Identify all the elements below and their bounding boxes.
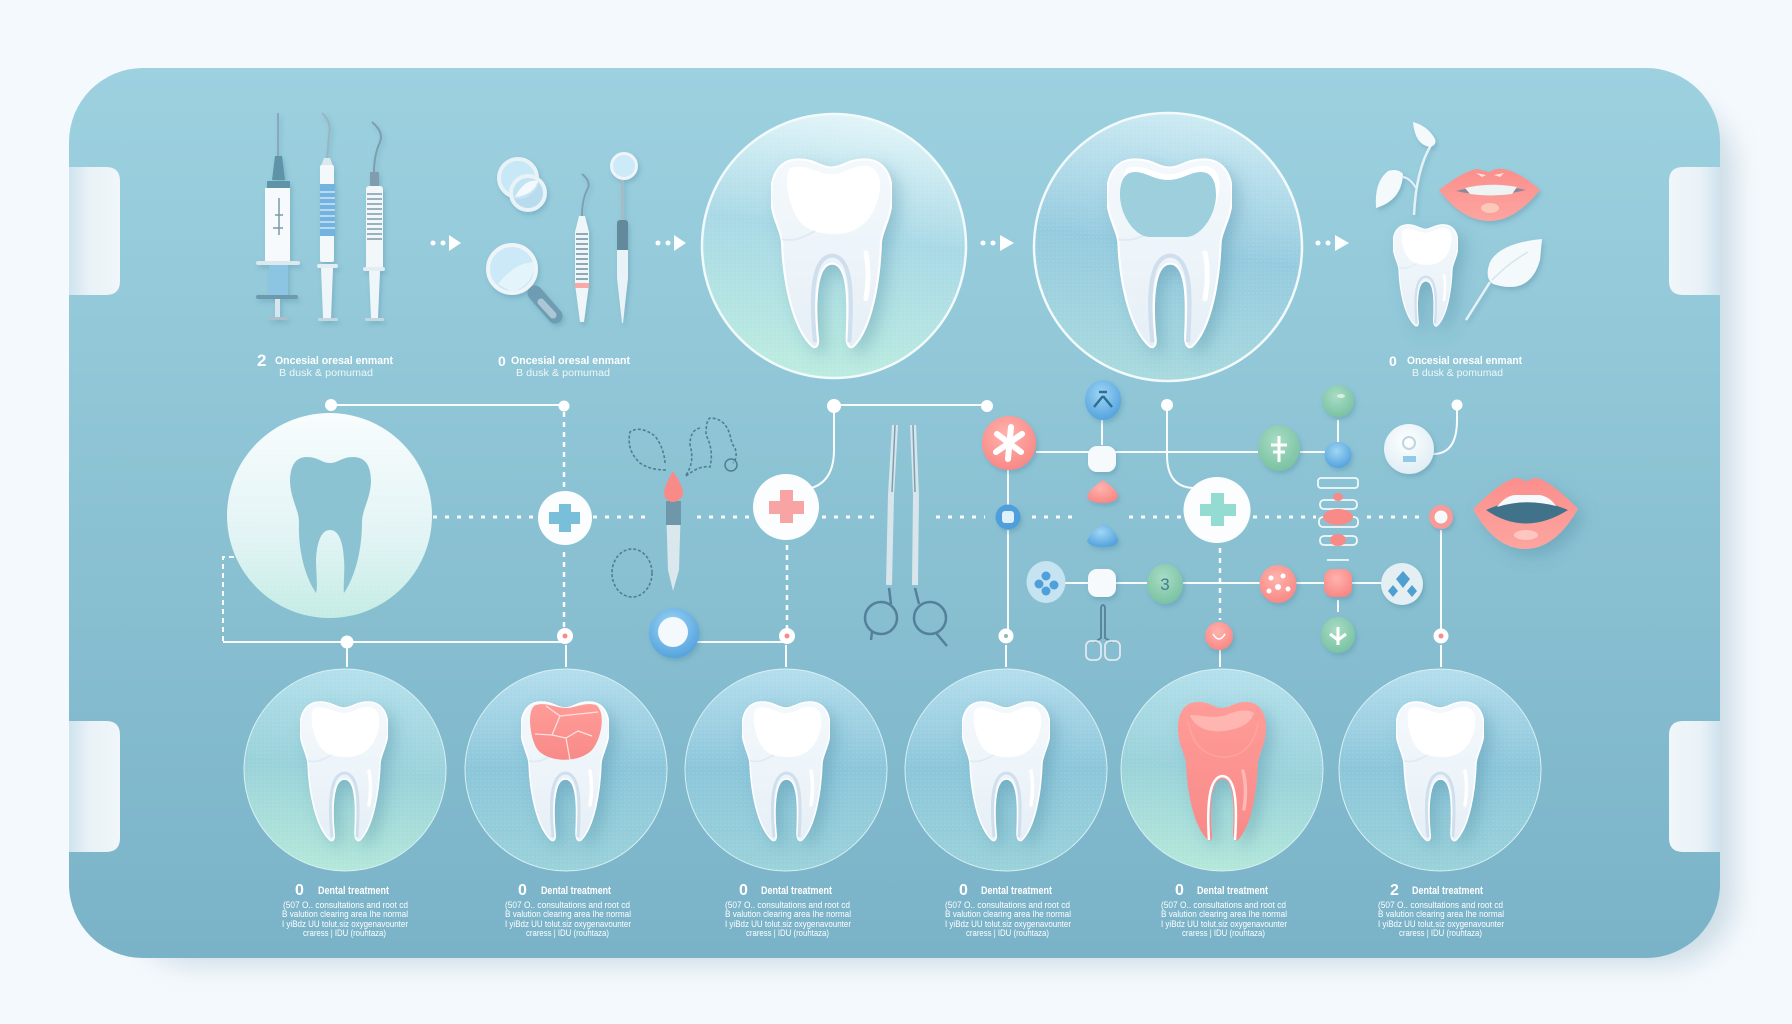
icon: pink ring node xyxy=(1429,505,1453,529)
panel shadow xyxy=(125,100,1735,965)
icon: tooth xyxy=(1393,225,1458,326)
icon: tooth xyxy=(742,702,830,841)
icon: blue drop xyxy=(1087,524,1118,547)
left tooth circle xyxy=(227,413,432,618)
caption 5: craress | IDU (rouhtaza) xyxy=(1182,928,1265,938)
icon: sprig of leaves xyxy=(1376,122,1435,215)
icon: pink flower xyxy=(1260,565,1296,603)
row of six treatment circles xyxy=(244,669,1541,938)
caption 1 xyxy=(282,882,408,938)
side tab: upper left xyxy=(69,167,120,295)
icon: white badge xyxy=(1384,424,1434,474)
node: open dots xyxy=(325,399,1462,648)
icon: tooth xyxy=(771,159,892,347)
node: blue square xyxy=(996,504,1020,530)
caption 4: (507 O.. consultations and root cd xyxy=(945,900,1070,910)
treatment 5 xyxy=(1121,669,1323,938)
icon: green top badge xyxy=(1322,385,1354,417)
caption 1: 0 xyxy=(295,882,304,899)
caption 3 xyxy=(725,882,851,938)
treatment 4 xyxy=(905,669,1107,938)
caption 4: craress | IDU (rouhtaza) xyxy=(966,928,1049,938)
icon: tooth silhouette xyxy=(290,457,371,593)
caption 5: 0 xyxy=(1175,882,1184,899)
node: pink plus xyxy=(753,474,819,540)
icon: dental mirror xyxy=(612,154,636,323)
caption 5 xyxy=(1161,882,1287,938)
caption 6: (507 O.. consultations and root cd xyxy=(1378,900,1503,910)
icon: open mouth xyxy=(1473,478,1578,549)
caption 4: 0 xyxy=(959,882,968,899)
caption 2: craress | IDU (rouhtaza) xyxy=(526,928,609,938)
caption 4: B valution clearing area Ihe normal xyxy=(945,909,1071,919)
step 2 caption xyxy=(498,353,630,379)
icon: red tooth xyxy=(1178,702,1266,841)
icon: tooth with cavity xyxy=(1107,159,1232,347)
step 5 caption xyxy=(1389,353,1522,379)
icon: suture needle with thread xyxy=(612,418,737,597)
caption 6 xyxy=(1378,882,1504,938)
arrow 3 xyxy=(980,235,1014,251)
step 1: instruments xyxy=(256,113,393,379)
caption 5: B valution clearing area Ihe normal xyxy=(1161,909,1287,919)
icon: dental explorer xyxy=(363,122,385,321)
treatment 3 xyxy=(685,669,887,938)
connector lines xyxy=(223,405,1457,667)
step 1 caption xyxy=(257,351,393,379)
step 1 caption: 2 xyxy=(257,351,266,370)
icon: green badge 3: 3 xyxy=(1160,575,1170,594)
caption 6: craress | IDU (rouhtaza) xyxy=(1399,928,1482,938)
caption 1: B valution clearing area Ihe normal xyxy=(282,909,408,919)
icon: blue molecule xyxy=(1026,561,1066,603)
caption 2: B valution clearing area Ihe normal xyxy=(505,909,631,919)
caption 5: Dental treatment xyxy=(1197,885,1268,897)
large circle: hollow tooth xyxy=(1034,113,1302,381)
icon: surgical scissors xyxy=(865,425,947,646)
dotted connector lines xyxy=(223,412,1425,642)
side tab: lower left xyxy=(69,721,120,852)
caption 4: I yiBdz UU tolut.siz oxygenavounter xyxy=(945,919,1071,929)
caption 6: Dental treatment xyxy=(1412,885,1483,897)
icon: green plant badge xyxy=(1258,425,1300,471)
caption 2: I yiBdz UU tolut.siz oxygenavounter xyxy=(505,919,631,929)
treatment 1 xyxy=(244,669,446,938)
side tab: upper right xyxy=(1669,167,1720,295)
icon: white and blue diamonds xyxy=(1381,563,1423,605)
icon: pink badge xyxy=(1205,622,1233,650)
caption 3: craress | IDU (rouhtaza) xyxy=(746,928,829,938)
icon: lips xyxy=(1439,169,1540,221)
step 2: examination tools xyxy=(488,154,636,379)
caption 1: I yiBdz UU tolut.siz oxygenavounter xyxy=(282,919,408,929)
caption 2: (507 O.. consultations and root cd xyxy=(505,900,630,910)
step 2 caption: 0 xyxy=(498,353,506,369)
caption 2: Dental treatment xyxy=(541,885,611,897)
step 5: healthy smile xyxy=(1376,122,1542,379)
icon: tooth xyxy=(962,702,1050,841)
treatment 6 xyxy=(1339,669,1541,938)
icon: large leaf xyxy=(1466,239,1542,320)
step 1 caption: Oncesial oresal enmant xyxy=(275,355,393,367)
plus node: mint xyxy=(1184,477,1250,543)
icon: blue pill xyxy=(1324,442,1352,468)
icon: green plant badge lower xyxy=(1321,617,1355,653)
arrow 4 xyxy=(1316,235,1349,251)
large circle: healthy tooth xyxy=(702,114,966,378)
side tab: lower right xyxy=(1669,721,1720,852)
caption 3: (507 O.. consultations and root cd xyxy=(725,900,850,910)
caption 4 xyxy=(945,882,1071,938)
caption 6: 2 xyxy=(1390,882,1399,899)
step 2 caption: Oncesial oresal enmant xyxy=(511,355,630,367)
icon: tooth xyxy=(1396,702,1484,841)
caption 1: Dental treatment xyxy=(318,885,389,897)
icon: tooth xyxy=(300,702,388,841)
arrow 2 xyxy=(656,235,686,251)
icon: green badge 3 xyxy=(1147,564,1183,604)
treatment 2 xyxy=(465,669,667,938)
icon: small scissors xyxy=(1086,605,1120,660)
caption 3: Dental treatment xyxy=(761,885,832,897)
icon: magnifier xyxy=(488,245,555,316)
icon: pink drop xyxy=(1087,480,1118,503)
caption 1: craress | IDU (rouhtaza) xyxy=(303,928,386,938)
step 5 caption: Oncesial oresal enmant xyxy=(1407,355,1522,367)
step 1 caption: B dusk & pomumad xyxy=(279,368,373,379)
step 2 caption: B dusk & pomumad xyxy=(516,368,610,379)
caption 5: I yiBdz UU tolut.siz oxygenavounter xyxy=(1161,919,1287,929)
node: pink star xyxy=(982,416,1036,470)
caption 5: (507 O.. consultations and root cd xyxy=(1161,900,1286,910)
caption 2: 0 xyxy=(518,882,527,899)
icon: dental probe xyxy=(317,113,338,321)
caption 6: I yiBdz UU tolut.siz oxygenavounter xyxy=(1378,919,1504,929)
arrow 1 xyxy=(430,235,461,251)
icon: cracked tooth xyxy=(521,702,609,841)
caption 3: B valution clearing area Ihe normal xyxy=(725,909,851,919)
caption 3: 0 xyxy=(739,882,748,899)
icon: implant stack xyxy=(1318,478,1358,560)
node: blue plus xyxy=(538,491,592,545)
caption 6: B valution clearing area Ihe normal xyxy=(1378,909,1504,919)
node: blue bubble xyxy=(649,608,699,658)
icon: blue pin xyxy=(1085,380,1121,420)
icon: white block lower xyxy=(1088,569,1116,597)
caption 4: Dental treatment xyxy=(981,885,1052,897)
caption 2 xyxy=(505,882,631,938)
icon: lenses xyxy=(499,159,545,210)
icon: syringe xyxy=(256,113,300,320)
icon: dental pick xyxy=(575,174,589,322)
icon: pink block xyxy=(1324,569,1352,597)
caption 1: (507 O.. consultations and root cd xyxy=(283,900,408,910)
step 5 caption: 0 xyxy=(1389,353,1397,369)
network icons xyxy=(1026,380,1453,660)
icon: white block xyxy=(1088,446,1116,472)
step 5 caption: B dusk & pomumad xyxy=(1412,368,1503,379)
caption 3: I yiBdz UU tolut.siz oxygenavounter xyxy=(725,919,851,929)
